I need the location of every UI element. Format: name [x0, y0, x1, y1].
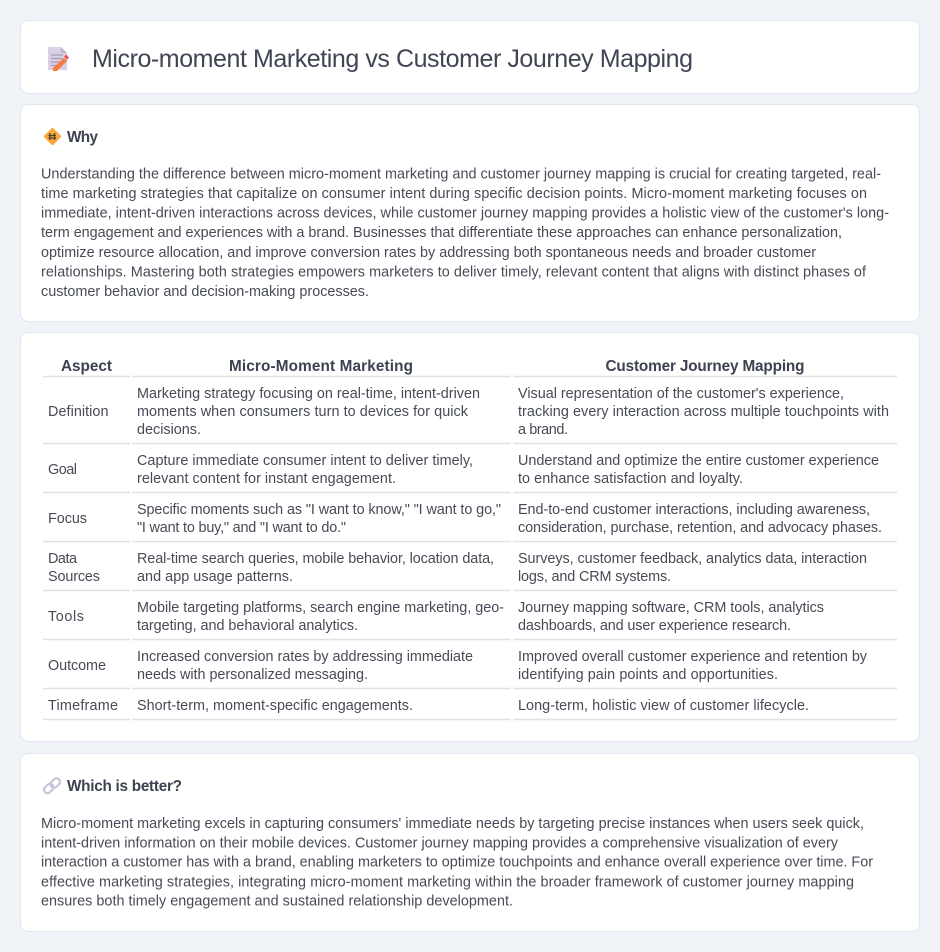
- row: focus: End-to-end customer interactions, including awareness,: [518, 502, 870, 518]
- row: definition: decisions.: [137, 422, 201, 438]
- panel: which is better: [20, 754, 920, 932]
- text block: why paragraph: immediate, intent-driven interactions across devices, while customer journey mapping provides a holistic view of the customer's long-: [41, 206, 889, 222]
- text block: why paragraph: time marketing strategies that capitalize on consumer intent during specific decision points. Micro-moment marketing focuses on: [41, 186, 867, 202]
- text block: which is better paragraph: ensures both timely engagement and sustained relationship development.: [41, 894, 513, 910]
- row: definition: moments when consumers turn to devices for quick: [137, 404, 469, 420]
- table header row: Micro-Moment Marketing: [229, 358, 413, 375]
- title: Micro-moment Marketing vs Customer Journey Mapping: [92, 45, 693, 73]
- row: data sources: and app usage patterns.: [137, 569, 293, 585]
- row: outcome: Improved overall customer experience and retention by: [518, 649, 868, 665]
- text block: why paragraph: relationships. Mastering both strategies empowers marketers to deliver timely, relevant content that aligns with distinct phases of: [41, 264, 867, 280]
- row: focus: "I want to buy," and "I want to do.": [137, 520, 346, 536]
- row: definition: a brand.: [518, 422, 568, 438]
- row: focus: [48, 502, 882, 536]
- panel: title header: [20, 20, 920, 94]
- text block: which is better paragraph: Micro-moment marketing excels in capturing consumers' immediate needs by targeting precise instances when users seek quick,: [41, 816, 864, 832]
- row: data sources: Real-time search queries, mobile behavior, location data,: [137, 551, 494, 567]
- row: timeframe: Timeframe: [48, 698, 118, 714]
- row: outcome: Outcome: [48, 658, 106, 674]
- row: focus: Focus: [48, 511, 87, 527]
- row: definition: Visual representation of the customer's experience,: [518, 386, 844, 402]
- table header row: Customer Journey Mapping: [606, 358, 804, 375]
- row: data sources: Surveys, customer feedback, analytics data, interaction: [518, 551, 867, 567]
- row: timeframe: [48, 698, 809, 714]
- text block: why paragraph: optimize resource allocation, and improve conversion rates by addressing both spontaneous needs and broader customer: [41, 245, 816, 261]
- row: tools: Mobile targeting platforms, search engine marketing, geo-: [137, 600, 504, 616]
- text block: which is better paragraph: interaction a customer has with a brand, enabling marketers to optimize touchpoints and enhance overall experience over time. For: [41, 854, 873, 870]
- heading: which is better: Which is better?: [67, 778, 182, 795]
- heading: why: Why: [67, 129, 98, 146]
- row: tools: targeting, and behavioral analytics.: [137, 618, 358, 634]
- row: definition: tracking every interaction across multiple touchpoints with: [518, 404, 889, 420]
- text block: why paragraph: Understanding the difference between micro-moment marketing and customer journey mapping is crucial for creating targeted, real-: [41, 166, 881, 182]
- row: outcome: [48, 649, 868, 683]
- row: outcome: needs with personalized messaging.: [137, 667, 368, 683]
- table header row: Aspect: [61, 358, 112, 375]
- icon: chain link: [43, 777, 61, 795]
- text block: which is better paragraph: [41, 816, 873, 910]
- row: timeframe: Long-term, holistic view of customer lifecycle.: [518, 698, 809, 714]
- row: focus: Specific moments such as "I want to know," "I want to go,": [137, 502, 501, 518]
- table header row: [61, 358, 804, 375]
- text block: why paragraph: customer behavior and decision-making processes.: [41, 284, 369, 300]
- row: tools: Tools: [48, 609, 84, 625]
- text block: which is better paragraph: intent-driven information on their mobile devices. Customer journey mapping provides a comprehensive visualization of every: [41, 835, 839, 851]
- row: definition: [48, 386, 889, 438]
- row: goal: relevant content for instant engagement.: [137, 471, 396, 487]
- row: goal: [48, 453, 879, 487]
- icon: diamond sign: [43, 127, 62, 146]
- panel: comparison table: [20, 332, 920, 742]
- row: timeframe: Short-term, moment-specific engagements.: [137, 698, 413, 714]
- row: tools: [48, 600, 824, 634]
- row: outcome: identifying pain points and opportunities.: [518, 667, 778, 683]
- row: data sources: logs, and CRM systems.: [518, 569, 671, 585]
- row: definition: Definition: [48, 404, 108, 420]
- text block: why paragraph: [41, 166, 889, 300]
- row: goal: to enhance satisfaction and loyalty.: [518, 471, 743, 487]
- row: goal: Goal: [48, 462, 77, 478]
- row: goal: Understand and optimize the entire customer experience: [518, 453, 879, 469]
- row: definition: Marketing strategy focusing on real-time, intent-driven: [137, 386, 480, 402]
- text block: why paragraph: term engagement and experiences with a brand. Businesses that differentiate these approaches can enhance personalization,: [41, 225, 842, 241]
- row: goal: Capture immediate consumer intent to deliver timely,: [137, 453, 473, 469]
- icon: document with pencil: [48, 47, 69, 71]
- row: data sources: Data: [48, 551, 77, 567]
- row: data sources: [48, 551, 867, 585]
- text block: which is better paragraph: effective marketing strategies, integrating micro-moment marketing within the broader framework of customer journey mapping: [41, 874, 854, 890]
- row: tools: dashboards, and user experience research.: [518, 618, 791, 634]
- panel: why: [20, 104, 920, 322]
- row: focus: consideration, purchase, retention, and advocacy phases.: [518, 520, 882, 536]
- row: outcome: Increased conversion rates by addressing immediate: [137, 649, 473, 665]
- row: data sources: Sources: [48, 569, 100, 585]
- row: tools: Journey mapping software, CRM tools, analytics: [518, 600, 824, 616]
